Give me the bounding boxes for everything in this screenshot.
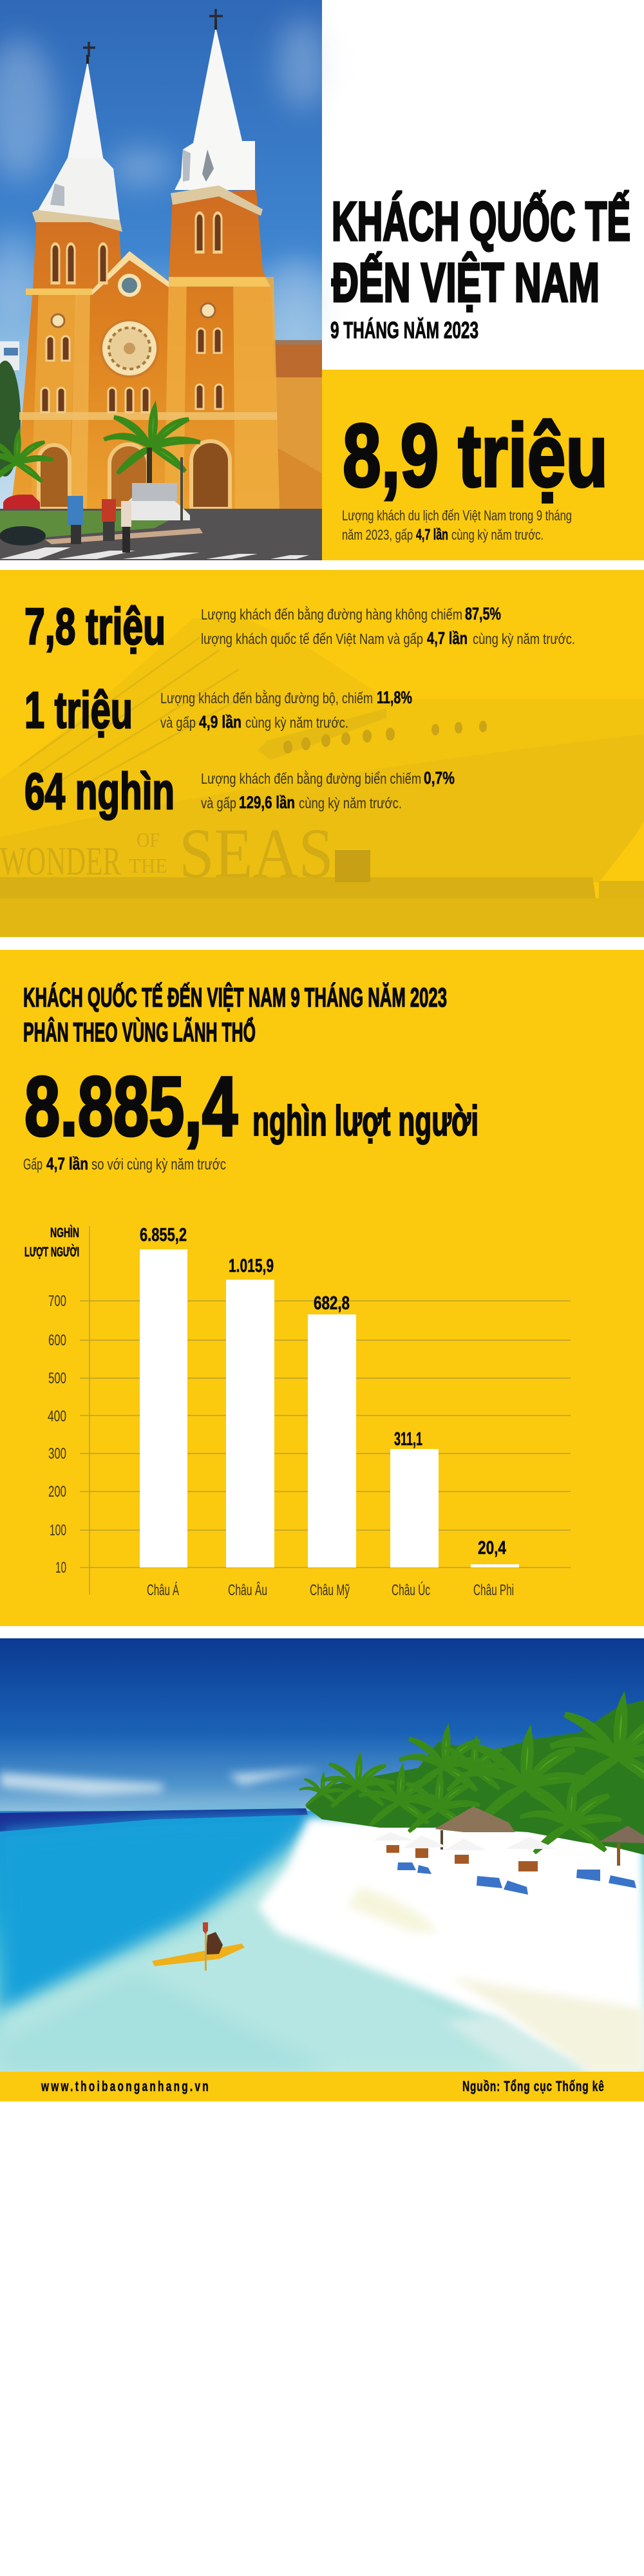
left spire <box>68 61 103 158</box>
ship name lettering: SEAS <box>179 814 334 893</box>
footer bar <box>0 2072 644 2101</box>
palm trees <box>299 1700 644 1855</box>
category labels: Châu Á <box>147 1582 179 1599</box>
category labels: Châu Phi <box>473 1582 514 1599</box>
huts and umbrellas <box>374 1806 644 1871</box>
palm trees <box>104 407 200 473</box>
ship name lettering <box>0 814 334 893</box>
y axis labels: 400 <box>48 1408 66 1425</box>
subtitle: 9 THÁNG NĂM 2023 <box>330 317 478 343</box>
panel: arrivals by transport mode <box>0 570 644 937</box>
stat: sea <box>24 762 455 820</box>
big total: nghìn lượt người <box>252 1097 478 1144</box>
background image: cruise ship <box>0 618 644 937</box>
y axis labels: 200 <box>48 1483 66 1501</box>
bar values <box>140 1225 506 1558</box>
growth note: Gấp <box>23 1156 43 1173</box>
stat: sea: 0,7% <box>424 768 455 788</box>
bar values: 1.015,9 <box>229 1256 274 1276</box>
y axis labels: 100 <box>50 1522 66 1539</box>
website: www.thoibaonganhang.vn <box>41 2079 209 2095</box>
ship name lettering: THE <box>129 854 167 877</box>
title <box>332 191 630 314</box>
big total: 8.885,4 <box>24 1059 238 1153</box>
church body <box>10 190 279 518</box>
panel: total visitors: cùng kỳ năm trước. <box>451 527 544 543</box>
stat: air: 4,7 lần <box>427 629 468 648</box>
left building and tree <box>0 341 19 370</box>
ship name lettering: OF <box>137 828 160 851</box>
bar chart <box>24 1225 571 1599</box>
panel: total visitors <box>322 370 644 560</box>
stat: sea: Lượng khách đến bằng đường biển chiếm <box>201 770 421 787</box>
portals <box>39 445 70 509</box>
clouds <box>0 1768 322 1795</box>
sky <box>0 1638 644 1811</box>
growth note: 4,7 lần <box>46 1154 88 1173</box>
big total <box>24 1059 478 1153</box>
stat: air: 7,8 triệu <box>24 598 166 655</box>
stat: sea: 64 nghìn <box>24 762 175 820</box>
rose window <box>101 320 158 377</box>
y axis labels: 600 <box>48 1332 66 1349</box>
stat: air: cùng kỳ năm trước. <box>473 630 575 647</box>
sand <box>258 1817 644 2072</box>
stat: road: và gấp <box>160 714 196 731</box>
right spire <box>175 27 255 190</box>
stat: road <box>24 681 412 739</box>
street <box>0 509 322 560</box>
y axis title: LƯỢT NGƯỜI <box>24 1244 79 1260</box>
bar values: 6.855,2 <box>140 1225 187 1245</box>
y axis labels: 500 <box>48 1370 66 1387</box>
belfry windows <box>52 213 222 283</box>
panel: total visitors: 4,7 lần <box>416 526 448 544</box>
y axis labels <box>48 1293 66 1577</box>
sea <box>0 1811 644 2072</box>
photo: Notre Dame cathedral Saigon <box>0 0 328 560</box>
stat: air <box>24 598 575 655</box>
stat: road: cùng kỳ năm trước. <box>245 714 348 731</box>
bars <box>140 1249 519 1567</box>
category labels: Châu Âu <box>228 1582 267 1599</box>
ship name lettering: WONDER <box>0 840 121 884</box>
source: Nguồn: Tổng cục Thống kê <box>462 2079 604 2095</box>
kayak <box>152 1922 245 1971</box>
y axis labels: 700 <box>48 1293 66 1310</box>
heading block <box>330 191 630 343</box>
stat: air: 87,5% <box>465 604 501 623</box>
panel: total visitors: năm 2023, gấp <box>342 527 413 543</box>
y axis title <box>24 1226 79 1260</box>
y axis labels: 10 <box>55 1559 66 1577</box>
blue cushions <box>397 1862 636 1895</box>
stat: sea: cùng kỳ năm trước. <box>299 795 402 811</box>
stat: air: lượng khách quốc tế đến Việt Nam và gấp <box>201 630 423 647</box>
y axis title: NGHÌN <box>50 1226 79 1240</box>
stat: road: 1 triệu <box>24 681 133 739</box>
category labels: Châu Mỹ <box>310 1582 350 1599</box>
bar values: 20,4 <box>478 1538 506 1558</box>
category labels <box>147 1582 514 1599</box>
description: Lượng khách du lịch đến Việt Nam trong 9 tháng <box>342 507 572 524</box>
growth note: so với cùng kỳ năm trước <box>91 1156 226 1173</box>
stat: sea: và gấp <box>201 795 236 811</box>
category labels: Châu Úc <box>392 1582 430 1599</box>
bar values: 682,8 <box>314 1293 350 1314</box>
stat: road: 4,9 lần <box>199 712 242 732</box>
section heading <box>23 981 447 1047</box>
y axis labels: 300 <box>48 1445 66 1463</box>
bar values: 311,1 <box>394 1429 422 1450</box>
panel: visitors by region <box>0 950 644 1626</box>
stat: road: Lượng khách đến bằng đường bộ, chiếm <box>160 690 373 706</box>
stat: sea: 129,6 lần <box>239 793 295 812</box>
cars and people <box>3 495 40 509</box>
photo: tropical beach <box>0 1638 644 2072</box>
section heading: PHÂN THEO VÙNG LÃNH THỔ <box>23 1016 256 1047</box>
stat: road: 11,8% <box>377 688 412 707</box>
stat: air: Lượng khách đến bằng đường hàng không chiếm <box>201 606 462 623</box>
nave right <box>273 343 322 380</box>
